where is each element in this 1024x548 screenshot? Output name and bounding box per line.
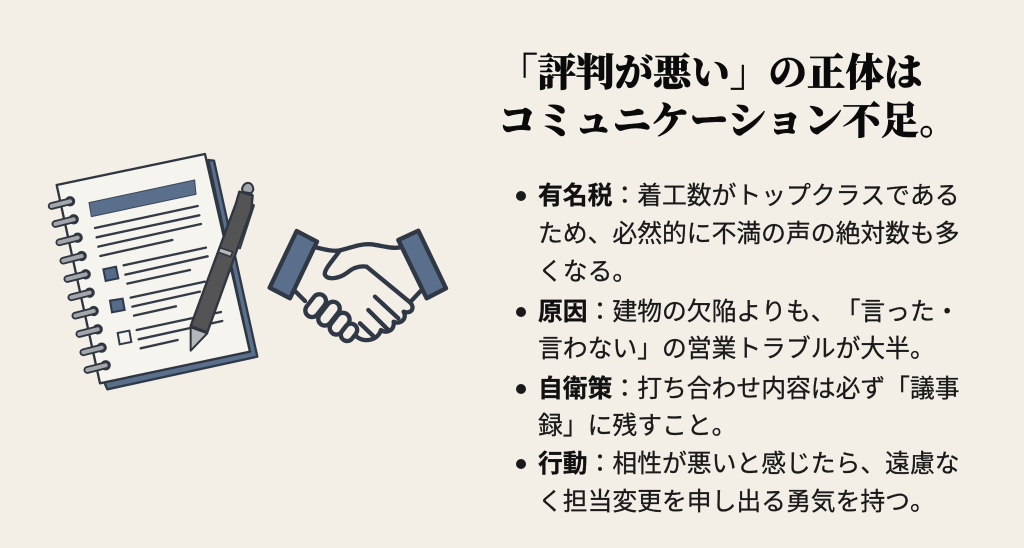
bullet: 自衛策: 録」に残すこと。	[538, 406, 736, 442]
heading bar	[89, 180, 196, 217]
bullet: 行動: く担当変更を申し出る勇気を持つ。	[538, 482, 935, 518]
spiral rings	[52, 197, 110, 370]
bullet: 原因: 言わない」の営業トラブルが大半。	[538, 329, 935, 365]
bullet: 有名税: 有名税：着工数がトップクラスである	[538, 176, 960, 212]
bullet: 行動: 行動：相性が悪いと感じたら、遠慮な	[538, 444, 960, 480]
checkboxes	[103, 267, 131, 344]
bullet: 有名税: ため、必然的に不満の声の絶対数も多	[538, 214, 960, 250]
title	[498, 52, 958, 143]
left cuff	[270, 231, 317, 298]
title: 「評判が悪い」の正体は	[499, 53, 923, 95]
pen	[191, 183, 254, 351]
bullet: 原因	[516, 292, 960, 365]
fist knuckles	[303, 292, 329, 320]
bullet: 有名税	[516, 176, 960, 288]
text lines	[95, 206, 222, 348]
bullet: 有名税: くなる。	[538, 252, 637, 288]
bullet: 原因: 原因：建物の欠陥よりも、「言った・	[538, 292, 960, 328]
bullet: 行動	[516, 444, 960, 518]
title: コミュニケーション不足。	[498, 101, 958, 143]
bullet: 自衛策	[516, 369, 960, 442]
hand outlines	[317, 244, 400, 251]
notebook page	[57, 154, 250, 383]
right cuff	[398, 231, 446, 298]
notebook back cover	[104, 160, 257, 389]
bullet: 自衛策: 自衛策：打ち合わせ内容は必ず「議事	[538, 369, 960, 405]
